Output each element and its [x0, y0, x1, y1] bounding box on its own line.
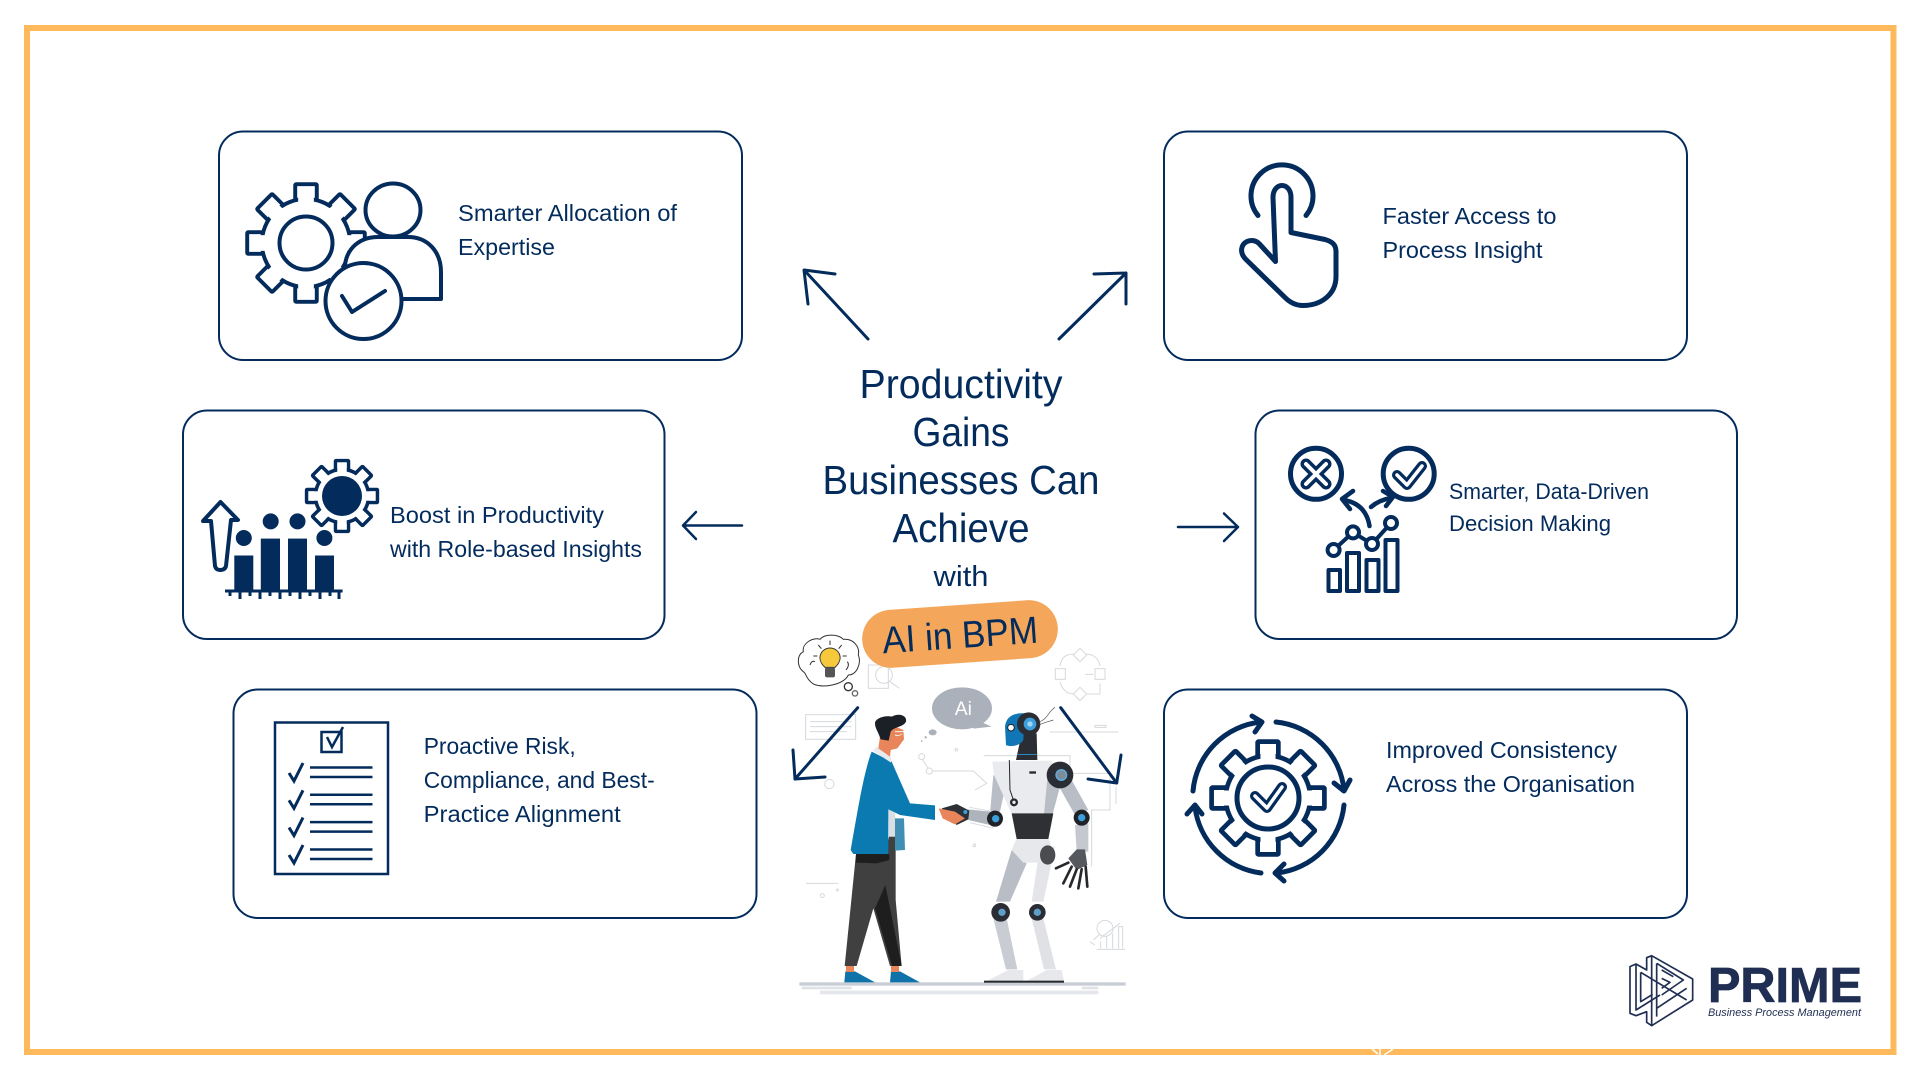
- icon: gear, person and check badge: [247, 184, 441, 339]
- logo mark: [1630, 956, 1693, 1026]
- text: faster access to process insight: Faster Access to: [1382, 203, 1556, 229]
- icon: gear with cycle arrows: [1187, 716, 1350, 881]
- icon: team bars with gear and arrow: [203, 461, 377, 599]
- logo: PRIME Business Process Management: [1630, 956, 1862, 1026]
- robot: [939, 707, 1090, 983]
- panel: smarter allocation of expertise: [219, 132, 742, 360]
- text: smarter data-driven decision making: Decision Making: [1449, 511, 1611, 536]
- text: smarter allocation of expertise: Expertise: [458, 234, 555, 260]
- panel: boost in productivity: [183, 410, 664, 639]
- subtitle: with: with: [932, 561, 988, 593]
- text: smarter allocation of expertise: Smarter Allocation of: [458, 200, 678, 226]
- title: Businesses Can: [822, 457, 1100, 503]
- background process decorations: [806, 648, 1125, 949]
- floor: [799, 982, 1126, 994]
- arrow: top right: [1059, 273, 1126, 339]
- text: smarter data-driven decision making: Smarter, Data-Driven: [1449, 479, 1649, 504]
- arrow: top left: [804, 270, 868, 339]
- arrow: bottom left: [793, 708, 858, 779]
- man: [844, 715, 935, 982]
- panel: improved consistency: [1164, 690, 1687, 918]
- illustration: man shaking hands with robot: [798, 635, 1126, 994]
- title: Productivity: [860, 361, 1063, 407]
- logo tagline: Business Process Management: [1708, 1007, 1862, 1019]
- title: Achieve: [892, 505, 1030, 551]
- icon: decision chart: [1290, 448, 1434, 591]
- arrow: bottom right: [1061, 708, 1121, 783]
- speech bubble: Ai: [921, 687, 992, 742]
- panel: smarter data-driven decision making: [1256, 410, 1737, 639]
- panel: proactive risk and compliance: [234, 690, 756, 918]
- arrow: left: [683, 512, 742, 539]
- text: improved consistency: Improved Consistency: [1386, 737, 1618, 763]
- text: boost in productivity: Boost in Productivity: [390, 502, 605, 528]
- text: proactive risk and compliance: Practice Alignment: [424, 801, 621, 827]
- text: improved consistency: Across the Organisation: [1386, 771, 1635, 797]
- title: Gains: [912, 409, 1010, 455]
- text: proactive risk and compliance: Proactive Risk,: [424, 733, 576, 759]
- text: boost in productivity: with Role-based Insights: [389, 536, 642, 562]
- title: [822, 361, 1100, 551]
- speech bubble: Ai: Ai: [955, 699, 972, 720]
- panel: faster access to process insight: [1164, 132, 1687, 360]
- icon: checklist: [275, 722, 388, 874]
- pill: AI in BPM: AI in BPM: [881, 610, 1039, 662]
- text: faster access to process insight: Process Insight: [1382, 237, 1543, 263]
- icon: tapping hand: [1242, 165, 1336, 306]
- logo wordmark: PRIME: [1708, 959, 1862, 1013]
- thought cloud with light bulb: [798, 635, 859, 696]
- text: proactive risk and compliance: Compliance, and Best-: [424, 767, 655, 793]
- arrow: right: [1178, 514, 1238, 541]
- pill: AI in BPM: [860, 598, 1060, 670]
